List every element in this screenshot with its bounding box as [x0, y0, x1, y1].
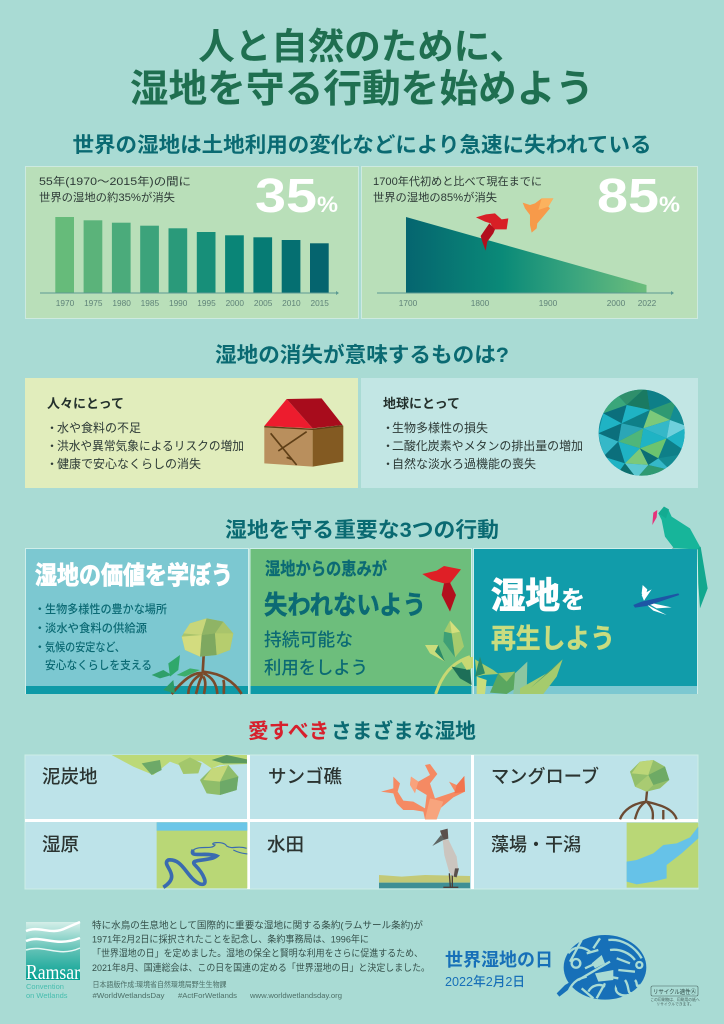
- icon: polygon globe: [598, 387, 688, 478]
- heading: wetlands loss: 世界の湿地は土地利用の変化などにより急速に失われている: [72, 134, 652, 157]
- panel text: 35%: [39, 174, 191, 204]
- title: 湿地を守る行動を始めよう: [130, 68, 594, 111]
- bar chart: 2000: [226, 298, 244, 308]
- action text: sustainable use: 失われないよう: [264, 590, 426, 620]
- icon: orange origami bird: [523, 198, 553, 233]
- panel text: 35%: 世界の湿地の約35%が消失: [39, 190, 175, 204]
- title: [130, 26, 594, 111]
- World Wetlands Day title and date: [445, 950, 553, 989]
- panel: action learn: [26, 548, 248, 694]
- recycling label: この印刷物は、印刷用の紙へ: [650, 997, 700, 1002]
- bullet list: learn: ・: [34, 603, 46, 616]
- panel text: 85%: 1700年代初めと比べて現在までに: [373, 174, 542, 188]
- logo: Ramsar: on Wetlands: [26, 991, 68, 1000]
- heading: meaning of loss: 湿地の消失が意味するものは?: [215, 343, 509, 367]
- text: for people: 人々にとって: [47, 396, 124, 411]
- panel: action restore: [474, 548, 698, 694]
- bar chart: 2010: [282, 298, 301, 308]
- logo: World Wetlands Day emblem: [557, 935, 646, 1000]
- cell: rice paddy: 水田: [267, 834, 304, 855]
- World Wetlands Day title and date: 世界湿地の日: [445, 950, 553, 970]
- heading: various wetlands: さまざまな湿地: [331, 719, 476, 743]
- area chart: [377, 217, 674, 308]
- icon: damaged house: [264, 398, 343, 467]
- World Wetlands Day title and date: 2022年2月2日: [445, 974, 525, 989]
- action text: restore: [491, 575, 615, 654]
- cell: tidal flat: [491, 823, 698, 888]
- stat: 85%: %: [659, 192, 680, 217]
- text block: about World Wetlands Day: 1971年2月2日に採択されたことを記念し、条約事務局は、1996年に: [92, 934, 369, 946]
- cell: mangrove: マングローブ: [491, 766, 599, 787]
- recycling label: リサイクルできます。: [656, 1002, 694, 1006]
- action heading: learn: 湿地の価値を学ぼう: [35, 562, 233, 590]
- bar chart: 1995: [197, 298, 216, 308]
- text: for the planet: 二酸化炭素やメタンの排出量の増加: [392, 439, 583, 453]
- cell: mangrove: [491, 760, 677, 819]
- cell: peatland: [42, 755, 247, 795]
- panel: for people: [25, 378, 358, 488]
- action text: restore: 湿地: [491, 575, 560, 616]
- bullet list: learn: ・: [34, 622, 46, 635]
- text block: about World Wetlands Day: [92, 920, 430, 974]
- heading: various wetlands: 愛すべき: [248, 720, 329, 743]
- text: for people: 水や食料の不足: [57, 421, 141, 435]
- credits and links: #WorldWetlandsDay: [92, 991, 165, 1000]
- text: for the planet: 地球にとって: [383, 396, 460, 411]
- heading: various wetlands: [248, 719, 476, 743]
- stat: 35%: %: [317, 192, 338, 217]
- text block: about World Wetlands Day: 「世界湿地の日」を定めました。湿地の保全と賢明な利用をさらに促進するため、: [92, 948, 423, 960]
- text: for people: [46, 396, 244, 471]
- icon: green parrot: [652, 507, 708, 608]
- panel text: 85%: [373, 174, 542, 204]
- panel text: 35%: 55年(1970〜2015年)の間に: [39, 174, 191, 188]
- cell: tidal flat: 藻場・干潟: [491, 834, 581, 855]
- bullet list: learn: 気候の安定など、: [45, 640, 125, 654]
- area chart: 1700: [399, 298, 418, 308]
- action text: restore: 再生しよう: [491, 624, 615, 654]
- text: for the planet: ・: [382, 457, 394, 471]
- panel: for the planet: [361, 378, 698, 488]
- area chart: 1900: [539, 298, 558, 308]
- panel: action sustainable use: [250, 548, 482, 694]
- action text: sustainable use: 持続可能な: [264, 630, 353, 650]
- logo: Ramsar: Ramsar: [26, 960, 80, 984]
- icon: dragonfly: [633, 585, 679, 615]
- panel: 85% area chart: [362, 166, 698, 318]
- icon: red origami bird: [476, 213, 508, 251]
- bar chart: 1970: [56, 298, 75, 308]
- heading: three actions: 湿地を守る重要な3つの行動: [225, 519, 499, 542]
- icon: red origami bird: [422, 566, 461, 612]
- bar chart: 1980: [112, 298, 131, 308]
- bar chart: [40, 217, 339, 308]
- text: for the planet: [382, 396, 583, 471]
- text block: about World Wetlands Day: 2021年8月、国連総会は、この日を国連の定める「世界湿地の日」と決定しました。: [92, 962, 430, 974]
- cell: marsh: 湿原: [42, 834, 79, 855]
- panel: 35% bar chart: [26, 166, 358, 318]
- stat: 85%: 85: [597, 170, 659, 223]
- cell: peatland: 泥炭地: [42, 766, 98, 787]
- text: for the planet: ・: [382, 439, 394, 453]
- icon: polygon plants: [475, 657, 563, 694]
- text: for the planet: ・: [382, 421, 394, 435]
- logo: Ramsar: Convention: [26, 982, 64, 991]
- text block: about World Wetlands Day: 特に水鳥の生息地として国際的に重要な湿地に関する条約(ラムサール条約)が: [92, 920, 423, 932]
- cell: coral reef: サンゴ礁: [268, 766, 342, 787]
- text: for people: 健康で安心なくらしの消失: [57, 456, 201, 471]
- wetland types grid: [25, 755, 698, 889]
- icon: green plant: [425, 621, 482, 694]
- logo: Ramsar: [26, 922, 80, 1000]
- area chart: 2022: [638, 298, 657, 308]
- bar chart: 1985: [141, 298, 160, 308]
- cell: rice paddy: [267, 829, 470, 888]
- text: for the planet: 自然な淡水ろ過機能の喪失: [392, 456, 536, 471]
- text: for people: ・: [46, 457, 58, 471]
- credits and links: #ActForWetlands: [178, 991, 237, 1000]
- action text: sustainable use: 利用をしよう: [264, 658, 368, 678]
- stat: 35%: [255, 170, 338, 223]
- text: for the planet: 生物多様性の損失: [392, 420, 488, 435]
- area chart: 1800: [471, 298, 490, 308]
- bar chart: 2005: [254, 298, 273, 308]
- stat: 85%: [597, 170, 680, 223]
- area chart: 2000: [607, 298, 626, 308]
- action text: restore: を: [561, 587, 585, 614]
- action text: sustainable use: [264, 559, 426, 678]
- bullet list: learn: [34, 602, 167, 672]
- cell: marsh: [42, 822, 247, 888]
- bullet list: learn: ・: [34, 641, 46, 654]
- bar chart: 1975: [84, 298, 103, 308]
- text: for people: ・: [46, 421, 58, 435]
- bar chart: 2015: [310, 298, 329, 308]
- icon: mangrove tree: [152, 618, 242, 694]
- action text: sustainable use: 湿地からの恵みが: [265, 559, 387, 579]
- stat: 35%: 35: [255, 170, 317, 223]
- credits and links: www.worldwetlandsday.org: [249, 991, 342, 1000]
- recycling label: [650, 986, 700, 1006]
- panel text: 85%: 世界の湿地の85%が消失: [373, 190, 497, 204]
- cell: coral reef: [268, 764, 465, 819]
- title: 人と自然のために、: [198, 26, 526, 67]
- bullet list: learn: 淡水や食料の供給源: [45, 621, 147, 635]
- bullet list: learn: 生物多様性の豊かな場所: [45, 602, 167, 616]
- credits and links: 日本語版作成:環境省自然環境局野生生物課: [92, 979, 227, 989]
- recycling label: リサイクル適性Ⓐ: [653, 988, 696, 996]
- text: for people: 洪水や異常気象によるリスクの増加: [57, 438, 244, 453]
- bullet list: learn: 安心なくらしを支える: [45, 658, 152, 672]
- bar chart: 1990: [169, 298, 188, 308]
- text: for people: ・: [46, 439, 58, 453]
- credits and links: [92, 979, 342, 1000]
